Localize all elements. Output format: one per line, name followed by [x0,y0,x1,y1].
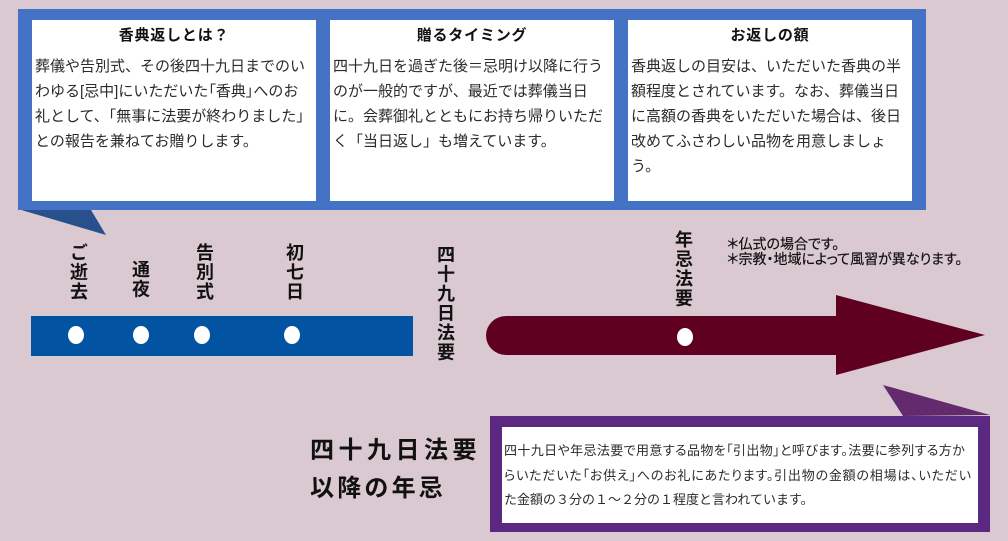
title: 四十九日法要 [310,437,481,464]
body text [35,58,311,150]
body text: た金額の３分の１～２分の１程度と言われています。 [504,492,814,507]
label: 告別式: 告別式 [194,243,214,302]
panel: お返しの額 [628,20,912,201]
heading: 贈るタイミング [417,27,527,44]
body text [504,443,972,507]
timeline markers [68,326,693,346]
panel: 贈るタイミング [330,20,614,201]
body text [333,58,603,150]
callout tail: purple [883,385,990,416]
body text: らいただいた「お供え」へのお礼にあたります。引出物の金額の相場は、いただい [504,468,972,483]
title [310,437,481,502]
body text: く「当日返し」も増えています。 [333,133,556,150]
heading: お返しの額 [730,27,810,44]
body text [631,58,901,175]
body text: わゆる[忌中]にいただいた「香典」へのお [35,83,298,100]
note [727,236,962,267]
body text: に高額の香典をいただいた場合は、後日 [631,108,901,125]
body text: 四十九日を過ぎた後＝忌明け以降に行う [333,58,603,75]
label: 四十九日法要: 四十九日法要 [435,245,455,362]
timeline arrow [486,295,985,375]
panel: 引出物 [502,427,978,523]
label: 通夜: 通夜 [130,260,150,299]
body text: う。 [631,158,660,175]
label: 年忌法要: 年忌法要 [673,230,693,308]
body text: 葬儀や告別式、その後四十九日までのい [35,58,305,75]
body text: に。会葬御礼とともにお持ち帰りいただ [333,108,603,125]
heading: 香典返しとは？ [119,27,229,44]
note: ＊宗教・地域によって風習が異なります。 [727,251,962,267]
callout frame: purple [490,416,990,532]
title: 以降の年忌 [310,475,446,502]
panel: 香典返しとは [32,20,316,201]
body text: 改めてふさわしい品物を用意しましょ [631,133,886,150]
callout tail: blue [18,209,106,235]
label: 初七日: 初七日 [284,243,304,302]
body text: 四十九日や年忌法要で用意する品物を「引出物」と呼びます。法要に参列する方か [504,443,965,458]
timeline bar [31,316,413,356]
body text: 額程度とされています。なお、葬儀当日 [631,83,899,100]
body text: との報告を兼ねてお贈りします。 [35,133,258,150]
note: ＊仏式の場合です。 [727,236,839,252]
label: ご逝去: ご逝去 [68,243,88,302]
body text: のが一般的ですが、最近では葬儀当日 [333,83,588,100]
callout frame: blue [18,9,926,210]
body text: 香典返しの目安は、いただいた香典の半 [631,58,901,75]
body text: 礼として、「無事に法要が終わりました」 [35,108,311,125]
